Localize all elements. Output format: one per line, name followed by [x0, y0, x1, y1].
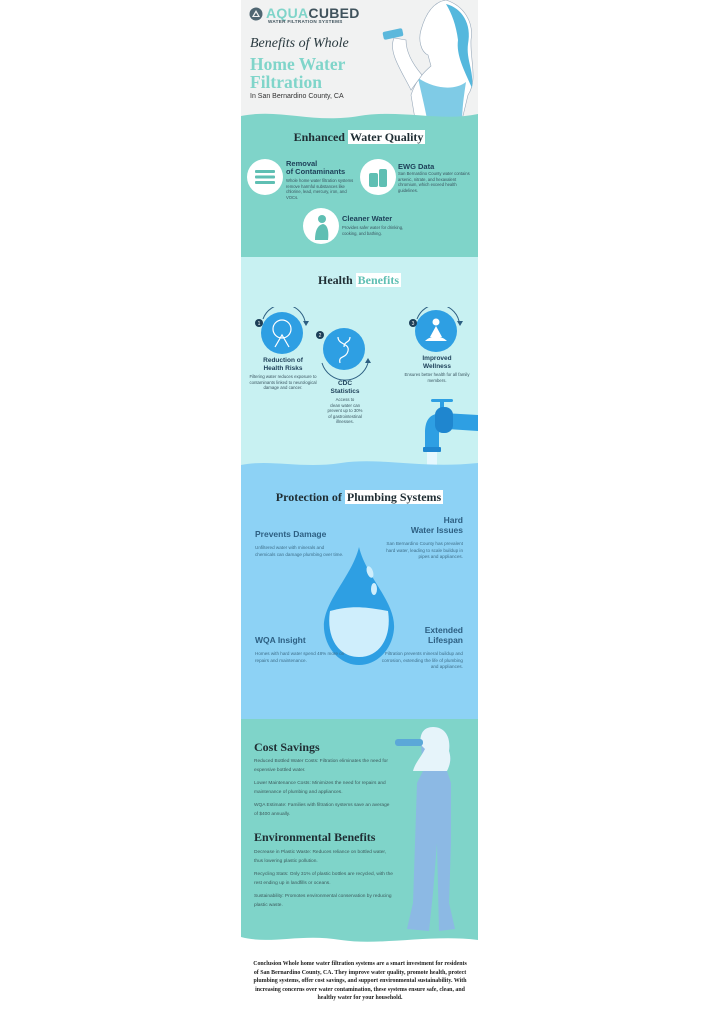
benefit 1: 1: [258, 321, 261, 327]
text: environmental list: Sustainability: Promotes environmental conservation by reducing plastic waste.: [254, 894, 392, 908]
benefit 2: of gastrointestinal: [328, 414, 362, 419]
wave divider: [241, 114, 478, 125]
block: hard water issues: [386, 515, 463, 559]
benefit 2: [316, 328, 371, 424]
benefit 1: Filtering water reduces exposure to contaminants linked to neurological damage and cancer.: [249, 374, 317, 390]
heading: environmental benefits: Environmental Benefits: [254, 830, 375, 844]
benefit 2: Access to: [336, 397, 354, 402]
benefit 2: 2: [319, 333, 322, 339]
benefit 3: [404, 307, 470, 383]
icon: bottles: [360, 159, 396, 195]
conclusion: Conclusion Whole home water filtration systems are a smart investment for residents of San Bernardino County, CA. They improve water quality, promote health, protect plumbing systems, offer cost savings, and support environmental sustainability. With increasing concerns over water contamination, these systems ensure safe, clean, and healthy water for your household.: [253, 961, 467, 1001]
heading: Protection of Plumbing Systems: [276, 490, 441, 504]
title: Home Water: [250, 54, 345, 74]
block: WQA insight: [255, 635, 344, 663]
block: extended lifespan: Filtration prevents mineral buildup and corrosion, extending the life of plumbing and appliances.: [382, 651, 463, 669]
heading: Enhanced Water Quality: [294, 130, 423, 144]
text: environmental list: [254, 850, 393, 908]
text: environmental list: Decrease in Plastic Waste: Reduces reliance on bottled water, thus lowering plastic pollution.: [254, 850, 386, 864]
benefit 3: 3: [412, 321, 415, 327]
title: [250, 36, 349, 100]
item: cleaner water: [303, 208, 403, 244]
item: removal of contaminants: of Contaminants: [286, 167, 345, 176]
logo: WATER FILTRATION SYSTEMS: [268, 19, 343, 24]
item: removal of contaminants: Whole home water filtration systems remove harmful substances like chlorine, lead, mercury, iron, and VOCs.: [286, 178, 353, 200]
title: Benefits of Whole: [250, 36, 349, 51]
icon: logo triangle: [250, 8, 262, 20]
benefit 2: clean water can: [330, 403, 360, 408]
wave divider: [241, 937, 478, 949]
benefit 2: Statistics: [331, 388, 359, 395]
text: environmental list: Recycling Stats: Only 31% of plastic bottles are recycled, with the rest ending up in landfills or oceans.: [254, 872, 393, 886]
block: WQA insight: Homes with hard water spend 48% more on repairs and maintenance.: [255, 651, 344, 662]
item: EWG data: EWG Data: [398, 162, 434, 171]
block: prevents damage: [255, 529, 343, 557]
logo: [250, 5, 360, 24]
silhouette: person drinking: [395, 727, 455, 931]
icon: faucet: [423, 399, 478, 465]
benefit 3: Improved: [422, 355, 452, 362]
benefit 2: CDC: [338, 380, 352, 387]
heading: cost savings: Cost Savings: [254, 740, 320, 754]
icon: person drinking: [303, 208, 339, 244]
benefit 2: illnesses.: [336, 419, 354, 424]
block: extended lifespan: Extended: [425, 625, 463, 635]
block: hard water issues: Hard: [444, 515, 463, 525]
block: extended lifespan: Lifespan: [428, 635, 463, 645]
brand name: AQUACUBED: [266, 5, 360, 21]
item: EWG data: San Bernardino County water contains arsenic, nitrate, and hexavalent chromium, which exceed health guidelines.: [398, 171, 470, 193]
text: cost list: [254, 758, 390, 817]
item: EWG data: [360, 159, 470, 195]
block: hard water issues: Water Issues: [411, 525, 463, 535]
block: extended lifespan: [382, 625, 463, 669]
text: cost list: WQA Estimate: Families with filtration systems save an average of $400 annually.: [254, 803, 389, 817]
title: Filtration: [250, 72, 322, 92]
icon: filter: [247, 159, 283, 195]
panel: protection of plumbing systems: [241, 473, 478, 719]
title: In San Bernardino County, CA: [250, 93, 344, 100]
heading: Health Benefits: [318, 273, 399, 287]
text: cost list: Lower Maintenance Costs: Minimizes the need for repairs and maintenance of plumbing and appliances.: [254, 781, 386, 795]
benefit 2: prevent up to 30%: [328, 408, 362, 413]
item: removal of contaminants: [247, 159, 354, 200]
benefit 1: [249, 307, 317, 390]
item: removal of contaminants: Removal: [286, 159, 317, 168]
item: cleaner water: Provides safer water for drinking, cooking, and bathing.: [342, 225, 403, 236]
benefit 3: Ensures better health for all family members.: [405, 372, 469, 383]
block: prevents damage: Unfiltered water with minerals and chemicals can damage plumbing over time.: [255, 545, 343, 556]
benefit 1: Reduction of: [263, 357, 303, 364]
panel: cost & environmental: [241, 719, 478, 949]
block: WQA insight: WQA Insight: [255, 635, 306, 645]
block: hard water issues: San Bernardino County has prevalent hard water, leading to scale buildup in pipes and appliances.: [386, 541, 463, 559]
panel: enhanced water quality: [241, 125, 478, 257]
wave divider: [241, 461, 478, 473]
benefit 1: Health Risks: [263, 365, 303, 372]
panel: header: [241, 0, 478, 125]
icon: water drop: [324, 547, 394, 665]
item: cleaner water: Cleaner Water: [342, 214, 392, 223]
benefit 3: Wellness: [423, 363, 451, 370]
block: prevents damage: Prevents Damage: [255, 529, 326, 539]
panel: health benefits: [241, 257, 478, 473]
illustration: woman drinking: [382, 0, 474, 117]
text: cost list: Reduced Bottled Water Costs: Filtration eliminates the need for expensive bottled water.: [254, 759, 388, 773]
